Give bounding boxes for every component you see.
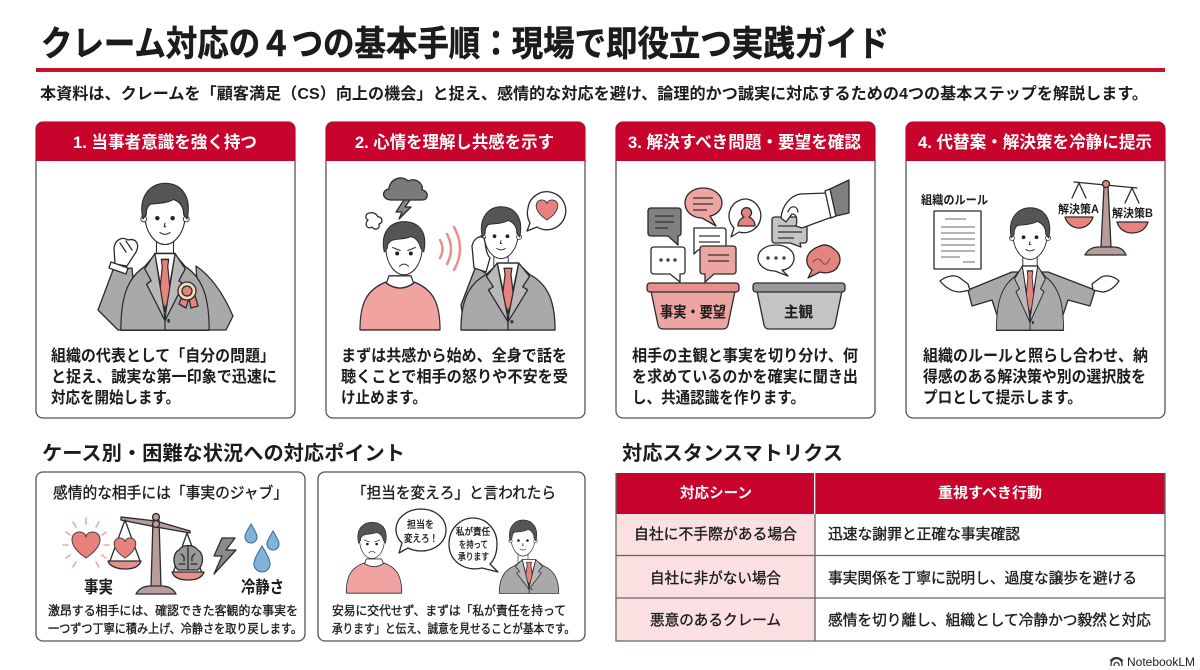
- row 2: 事実関係を丁寧に説明し、過度な譲歩を避ける: [828, 570, 1137, 587]
- icon: speech bubbles sorted into bins: 事実・要望: [660, 303, 726, 321]
- step 3 header: [616, 122, 875, 161]
- icon: rules document: [921, 192, 988, 269]
- step 2 text: [341, 346, 568, 407]
- step 2 text: け止めます。: [341, 389, 427, 407]
- panel: emotional customer: [36, 472, 305, 641]
- step 3 text: [632, 346, 858, 407]
- step 1 header: [36, 122, 295, 161]
- step 4 text: [923, 347, 1148, 407]
- panel text: 安易に交代せず、まずは「私が責任を持って: [332, 603, 566, 618]
- icon: businessman with fist and rosette: [98, 183, 233, 330]
- icon: heart with rays: [63, 518, 109, 567]
- icon: speech bubbles sorted into bins: 主観: [784, 303, 813, 321]
- heading: case section: ケース別・困難な状況への対応ポイント: [42, 442, 405, 465]
- row 3: 悪意のあるクレーム: [650, 612, 781, 629]
- step 1 header: 1. 当事者意識を強く持つ: [73, 133, 257, 152]
- row 2: 自社に非がない場合: [650, 570, 781, 587]
- step 3 text: し、共通認識を作ります。: [632, 389, 805, 407]
- row 3: 感情を切り離し、組織として冷静かつ毅然と対応: [828, 612, 1151, 629]
- icon: rules document: 組織のルール: [921, 192, 988, 207]
- table: stance matrix: [616, 473, 1165, 641]
- icon: balance scale with heart and brain: [108, 514, 204, 594]
- row 3: [650, 612, 1151, 629]
- step 4 text: 得感のある解決策や別の選択肢を: [923, 367, 1146, 386]
- step 4 text: プロとして提示します。: [923, 389, 1082, 407]
- brand mark: NotebookLM: [1127, 657, 1195, 669]
- panel: step 2: [326, 122, 585, 418]
- label: facts: 事実: [84, 578, 113, 597]
- intro text: 本資料は、クレームを「顧客満足（CS）向上の機会」と捉え、感情的な対応を避け、論理的かつ誠実に対応するための4つの基本ステップを解説します。: [40, 84, 1148, 103]
- row 1: [634, 526, 1020, 543]
- icon: water drops: [245, 524, 279, 572]
- table header: 対応シーン: [680, 484, 752, 502]
- icon: staff with speech bubble: 承ります: [458, 552, 489, 563]
- icon: customer with speech bubble: 担当を: [407, 518, 434, 531]
- step 1 text: 対応を開始します。: [51, 389, 180, 407]
- table header: 重視すべき行動: [938, 485, 1042, 502]
- icon: businessman presenting with open hands: [940, 208, 1119, 330]
- step 1 text: と捉え、誠実な第一印象で迅速に: [51, 367, 277, 386]
- step 3 text: 相手の主観と事実を切り分け、何: [632, 346, 858, 365]
- step 3 text: を求めているのかを確実に聞き出: [632, 367, 858, 386]
- icon: listening businessman with heart bubble: [461, 192, 566, 330]
- icon: customer with speech bubble: [346, 509, 446, 593]
- title: クレーム対応の４つの基本手順：現場で即役立つ実践ガイド: [41, 25, 889, 64]
- icon: speech bubbles sorted into bins: [647, 180, 849, 329]
- panel: step 3: [616, 122, 875, 418]
- icon: customer with speech bubble: 変えろ！: [404, 532, 438, 545]
- panel: step 4: [906, 122, 1165, 418]
- icon: balance scale with options: [1058, 180, 1153, 255]
- panel text: 激昂する相手には、確認できた客観的な事実を: [48, 603, 298, 618]
- step 2 text: 聴くことで相手の怒りや不安を受: [341, 367, 568, 386]
- icon: balance scale with options: 解決策B: [1112, 206, 1153, 220]
- panel title: 感情的な相手には「事実のジャブ」: [53, 483, 288, 502]
- step 1 text: [51, 346, 277, 407]
- step 2 header: 2. 心情を理解し共感を示す: [355, 132, 554, 152]
- panel title: 「担当を変えろ」と言われたら: [352, 484, 556, 502]
- panel: step 1: [36, 122, 295, 418]
- heading: stance matrix: 対応スタンスマトリクス: [622, 442, 843, 465]
- label: calm: 冷静さ: [241, 578, 284, 597]
- step 4 header: 4. 代替案・解決策を冷静に提示: [918, 132, 1152, 152]
- step 4 header: [906, 122, 1165, 161]
- icon: staff with speech bubble: を持って: [459, 539, 488, 551]
- table header: [616, 473, 1165, 514]
- step 1 text: 組織の代表として「自分の問題」: [51, 346, 275, 365]
- step 4 text: 組織のルールと照らし合わせ、納: [923, 347, 1148, 365]
- icon: balance scale with options: 解決策A: [1058, 202, 1099, 216]
- panel text: 一つずつ丁寧に積み上げ、冷静さを取り戻します。: [48, 621, 302, 636]
- icon: staff with speech bubble: 私が責任: [456, 526, 490, 538]
- panel: change the person in charge: [318, 472, 585, 641]
- row 2: [650, 570, 1137, 587]
- panel text: [332, 603, 575, 636]
- icon: sound waves: [440, 227, 460, 270]
- icon: staff with speech bubble: [449, 518, 559, 593]
- step 2 text: まずは共感から始め、全身で話を: [341, 346, 567, 365]
- step 2 header: [326, 122, 585, 161]
- icon: lightning: [214, 538, 236, 574]
- step 3 header: 3. 解決すべき問題・要望を確認: [628, 133, 861, 152]
- panel text: 承ります」と伝え、誠意を見せることが基本です。: [332, 621, 575, 636]
- row 1: 迅速な謝罪と正確な事実確認: [828, 526, 1020, 543]
- icon: angry customer with storm cloud: [360, 178, 440, 330]
- panel text: [48, 603, 302, 636]
- row 1: 自社に不手際がある場合: [634, 526, 797, 543]
